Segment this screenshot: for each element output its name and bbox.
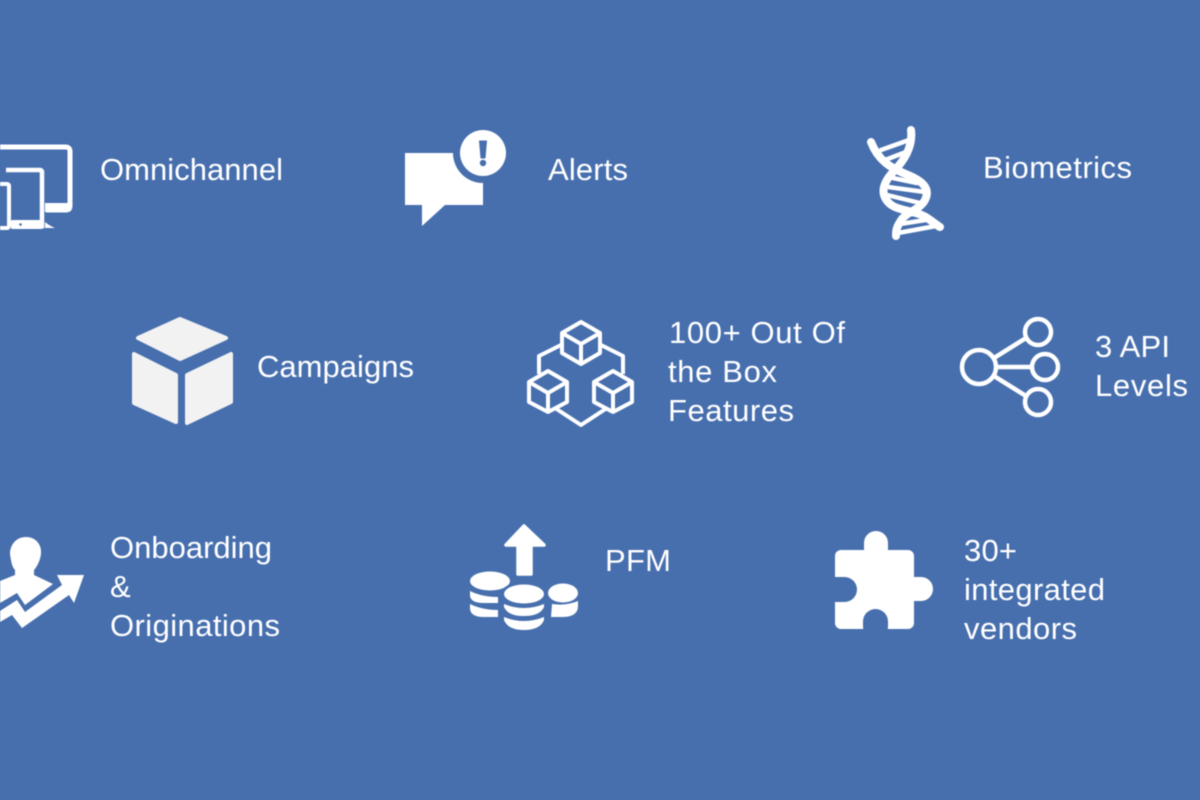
icon: person with rising arrow xyxy=(0,537,84,628)
label: 30+ integrated vendors: 30+ xyxy=(964,533,1017,568)
icon: DNA helix xyxy=(871,130,940,236)
icon: solid cube xyxy=(134,319,231,423)
label: 100+ Out Of the Box Features: Features xyxy=(668,393,794,428)
feature: 3 API Levels xyxy=(962,319,1188,415)
feature: Campaigns xyxy=(134,319,414,423)
icon: alert speech bubble xyxy=(405,123,513,226)
icon: puzzle piece xyxy=(820,531,933,639)
label: Alerts: Alerts xyxy=(548,152,628,187)
label: Onboarding & Originations: Originations xyxy=(110,608,280,643)
icon: coins with up arrow xyxy=(470,526,578,630)
icon: connected cubes xyxy=(529,322,632,425)
label: 30+ integrated vendors: vendors xyxy=(964,611,1077,646)
label: Omnichannel: Omnichannel xyxy=(100,152,283,187)
icon: devices xyxy=(0,147,72,229)
feature: 30+ integrated vendors xyxy=(820,531,1105,646)
feature: PFM xyxy=(470,526,671,630)
label: Onboarding & Originations: Onboarding xyxy=(110,530,272,565)
label: 30+ integrated vendors: integrated xyxy=(964,572,1105,607)
feature: Onboarding & Originations xyxy=(0,530,280,643)
label: 3 API Levels: 3 API xyxy=(1095,329,1170,364)
label: Campaigns: Campaigns xyxy=(257,349,414,384)
label: PFM: PFM xyxy=(605,543,671,578)
feature: Biometrics xyxy=(871,130,1132,236)
label: 3 API Levels xyxy=(1095,329,1188,403)
icon: share nodes xyxy=(962,319,1058,415)
label: Biometrics: Biometrics xyxy=(983,150,1132,185)
label: 100+ Out Of the Box Features: 100+ Out Of xyxy=(669,315,845,350)
label: 100+ Out Of the Box Features: the Box xyxy=(668,354,778,389)
feature: Omnichannel xyxy=(0,147,283,229)
label: 30+ integrated vendors xyxy=(964,533,1105,646)
label: 100+ Out Of the Box Features xyxy=(668,315,845,428)
label: Onboarding & Originations xyxy=(110,530,280,643)
label: Onboarding & Originations: & xyxy=(110,569,131,604)
label: 3 API Levels: Levels xyxy=(1095,368,1188,403)
feature: Alerts xyxy=(405,123,628,226)
feature: 100+ Out Of the Box Features xyxy=(529,315,845,428)
